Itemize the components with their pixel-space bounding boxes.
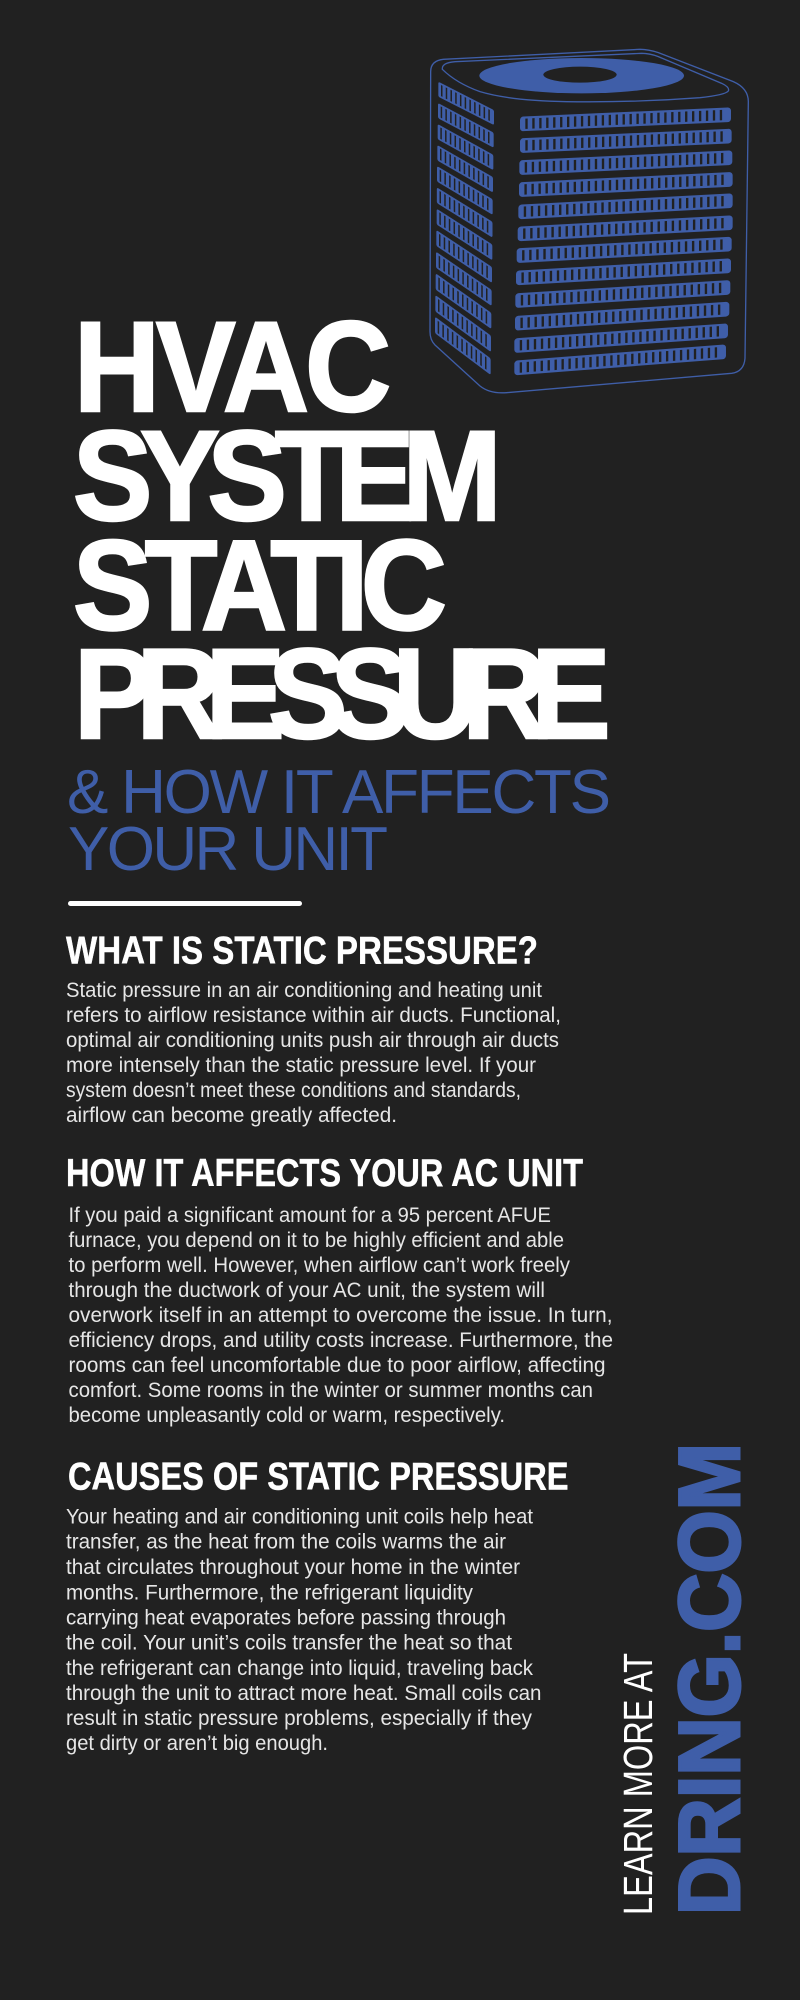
text block: causes of static pressure: get dirty or aren’t big enough. [66, 1732, 328, 1755]
text block: how it affects your ac unit: through the ductwork of your AC unit, the system will [68, 1279, 545, 1302]
title: SYSTEM [73, 405, 502, 548]
divider line [68, 901, 302, 906]
text block: how it affects your ac unit: comfort. Some rooms in the winter or summer months can [68, 1379, 593, 1402]
title: STATIC [73, 515, 447, 657]
text block: causes of static pressure: the refrigerant can change into liquid, traveling back [66, 1657, 533, 1680]
text block: how it affects your ac unit [68, 1204, 613, 1427]
title [73, 296, 611, 766]
text block: how it affects your ac unit: efficiency drops, and utility costs increase. Furthermore, the [68, 1329, 613, 1352]
unit top inner outline [442, 53, 729, 102]
heading: what is static pressure: WHAT IS STATIC PRESSURE? [66, 930, 538, 972]
side grille [435, 82, 494, 375]
text block: causes of static pressure: transfer, as the heat from the coils warms the air [66, 1530, 506, 1554]
text block: how it affects your ac unit: furnace, you depend on it to be highly efficient and able [68, 1229, 564, 1252]
subtitle: & HOW IT AFFECTS [67, 758, 611, 827]
text block: causes of static pressure: result in static pressure problems, especially if they [66, 1707, 532, 1730]
title: PRESSURE [74, 623, 611, 766]
icon: air conditioning unit [430, 49, 748, 393]
text block: causes of static pressure: through the unit to attract more heat. Small coils can [66, 1682, 542, 1705]
heading: causes of static pressure: CAUSES OF STATIC PRESSURE [68, 1456, 568, 1498]
vertical call to action: learn more at: LEARN MORE AT [615, 1653, 661, 1915]
text block: what is static pressure: airflow can become greatly affected. [66, 1104, 397, 1127]
text block: what is static pressure [66, 979, 561, 1127]
subtitle [67, 758, 611, 884]
fan disc [479, 58, 684, 93]
text block: what is static pressure: optimal air conditioning units push air through air ducts [66, 1029, 559, 1052]
title: HVAC [74, 296, 391, 439]
text block: causes of static pressure: Your heating and air conditioning unit coils help heat [66, 1506, 533, 1528]
vertical website name: DRING.COM [662, 1443, 758, 1915]
text block: causes of static pressure: months. Furthermore, the refrigerant liquidity [66, 1582, 473, 1604]
text block: how it affects your ac unit: become unpleasantly cold or warm, respectively. [68, 1404, 505, 1427]
text block: what is static pressure: Static pressure in an air conditioning and heating unit [66, 979, 542, 1002]
text block: how it affects your ac unit: If you paid a significant amount for a 95 percent AFUE [68, 1204, 551, 1227]
subtitle: YOUR UNIT [68, 815, 388, 884]
text block: causes of static pressure: the coil. Your unit’s coils transfer the heat so that [66, 1632, 512, 1654]
front grille [514, 107, 733, 375]
text block: what is static pressure: system doesn’t meet these conditions and standards, [66, 1079, 521, 1102]
unit outer outline [430, 49, 748, 393]
text block: causes of static pressure: that circulates throughout your home in the winter [66, 1556, 520, 1579]
text block: what is static pressure: refers to airflow resistance within air ducts. Functional, [66, 1004, 561, 1027]
heading: how it affects your ac unit: HOW IT AFFECTS YOUR AC UNIT [66, 1152, 583, 1195]
text block: how it affects your ac unit: overwork itself in an attempt to overcome the issue. In turn, [68, 1304, 612, 1327]
text block: what is static pressure: more intensely than the static pressure level. If your [66, 1054, 536, 1077]
text block: how it affects your ac unit: rooms can feel uncomfortable due to poor airflow, affecting [68, 1354, 606, 1377]
text block: causes of static pressure: carrying heat evaporates before passing through [66, 1606, 506, 1630]
text block: causes of static pressure [66, 1506, 542, 1755]
text block: how it affects your ac unit: to perform well. However, when airflow can’t work freely [68, 1254, 570, 1277]
